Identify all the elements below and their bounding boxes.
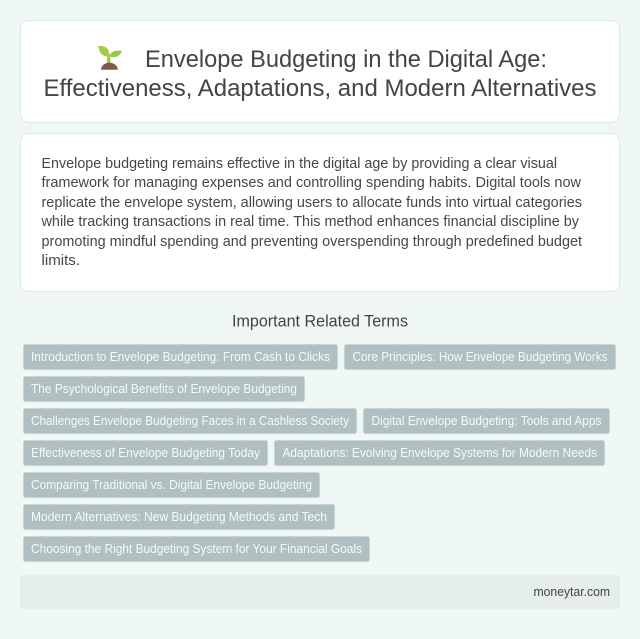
tag: choosing system: Choosing the Right Budgeting System for Your Financial Goals [31,542,362,556]
title text [44,46,596,102]
tag: core principles [344,344,616,370]
summary text [41,155,583,269]
tag: effectiveness: Effectiveness of Envelope Budgeting Today [31,446,261,460]
summary text: Envelope budgeting remains effective in the digital age by providing a clear visual [42,155,557,172]
title text: Effectiveness, Adaptations, and Modern Alternatives [44,75,596,102]
tag: introduction: Introduction to Envelope Budgeting: From Cash to Clicks [31,350,330,364]
title text: Envelope Budgeting in the Digital Age: [145,46,547,73]
tag: comparing: Comparing Traditional vs. Digital Envelope Budgeting [31,478,312,492]
summary text: replicate the envelope system, allowing users to allocate funds into virtual categories [42,194,582,211]
tag: digital tools: Digital Envelope Budgeting: Tools and Apps [372,414,602,428]
panel: related term tags [24,344,616,562]
tag: adaptations: Adaptations: Evolving Envelope Systems for Modern Needs [282,446,597,460]
tag: core principles: Core Principles: How Envelope Budgeting Works [352,350,608,364]
summary text: while tracking transactions in real time. This method enhances financial discipline by [41,213,579,230]
tag: psychological benefits [24,376,304,402]
summary text: promoting mindful spending and preventing overspending through predefined budget [42,233,583,250]
footer source text: moneytar.com [534,585,610,599]
tag: choosing system [24,536,370,562]
tag: modern alternatives: Modern Alternatives: New Budgeting Methods and Tech [31,510,327,524]
tag: comparing [24,472,320,498]
summary text: framework for managing expenses and controlling spending habits. Digital tools now [42,174,581,191]
panel: summary paragraph [20,134,620,292]
icon: seedling [98,46,122,70]
tag: digital tools [364,408,610,434]
tag: psychological benefits: The Psychological Benefits of Envelope Budgeting [31,382,297,396]
summary text: limits. [42,252,80,269]
tag: effectiveness [24,440,268,466]
tag: adaptations [274,440,604,466]
tag: modern alternatives [24,504,334,530]
footer bar [20,575,620,609]
heading: important related terms: Important Related Terms [232,312,408,330]
tag: challenges [24,408,356,434]
panel: title header [20,20,620,122]
tag: challenges: Challenges Envelope Budgeting Faces in a Cashless Society [31,414,350,428]
tag: introduction [24,344,338,370]
